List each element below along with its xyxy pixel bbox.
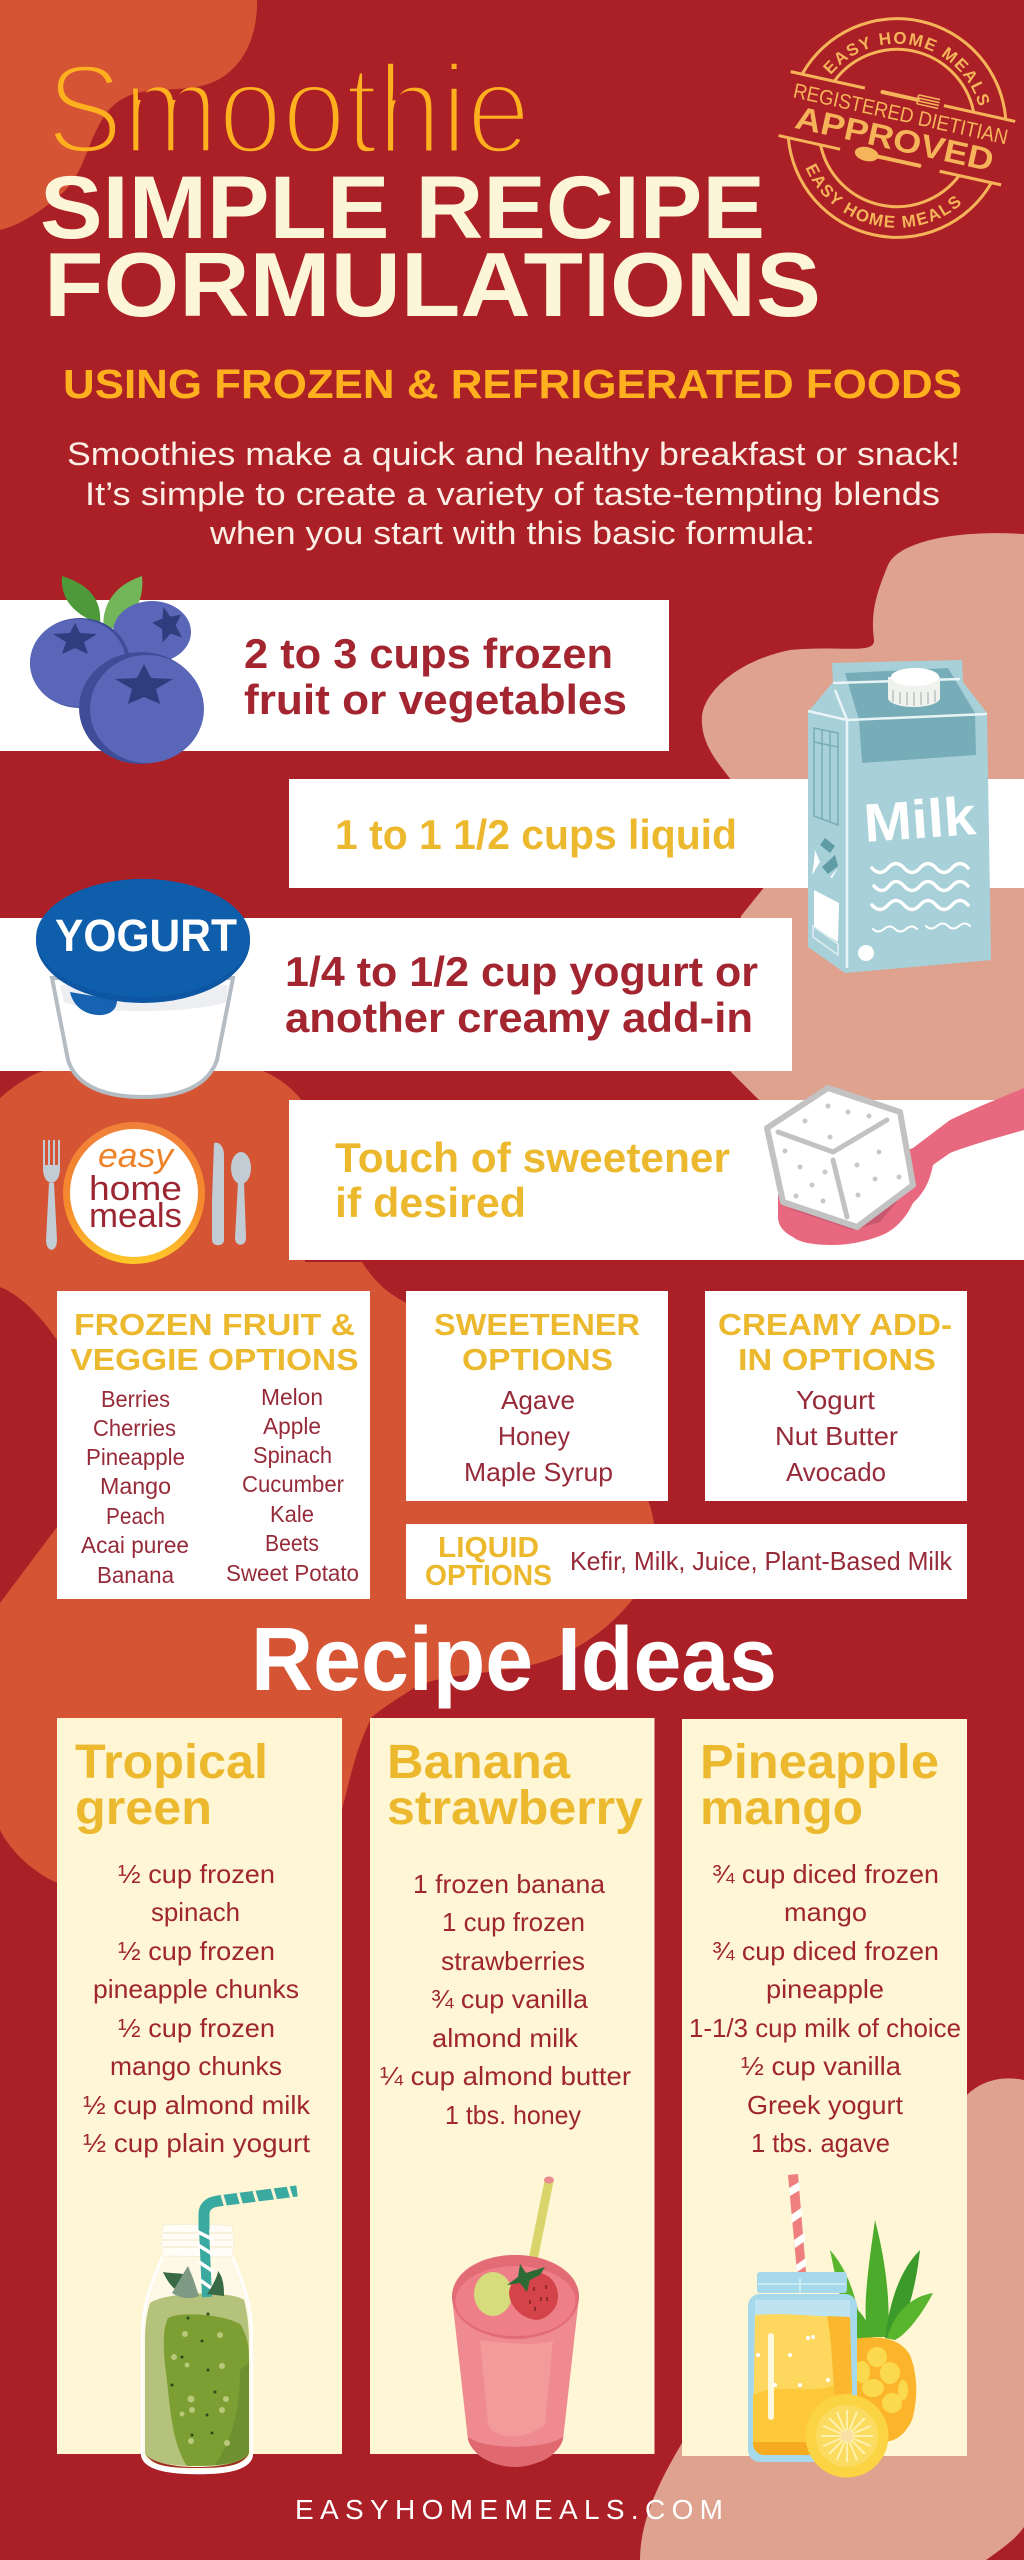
- recipe card: pineapple mango: ¾ cup diced frozen: [712, 1936, 939, 1966]
- icon: blueberries: [30, 576, 204, 764]
- panel: liquid options: LIQUID: [438, 1532, 539, 1564]
- formula bar: frozen fruit: 2 to 3 cups frozen: [244, 630, 613, 677]
- panel: sweetener options: Agave: [501, 1385, 575, 1415]
- panel: sweetener options: [406, 1291, 668, 1501]
- panel: liquid options: [406, 1524, 967, 1599]
- icon: yogurt cup: YOGURT: [55, 910, 237, 961]
- panel: creamy add-in options: IN OPTIONS: [738, 1342, 936, 1377]
- recipe card: banana strawberry: [370, 1718, 654, 2454]
- recipe card: tropical green: ½ cup frozen: [118, 2013, 275, 2043]
- panel: creamy add-in options: [705, 1291, 967, 1501]
- recipe card: pineapple mango: Greek yogurt: [747, 2090, 904, 2120]
- intro paragraph: [67, 436, 960, 551]
- panel: frozen fruit and veggie options: Sweet Potato: [226, 1560, 359, 1586]
- panel: sweetener options: OPTIONS: [462, 1342, 613, 1377]
- recipe card: tropical green: spinach: [151, 1897, 240, 1927]
- panel: frozen fruit and veggie options: Banana: [97, 1562, 174, 1588]
- title line: Simple Recipe: SIMPLE RECIPE: [40, 157, 765, 257]
- recipe card: pineapple mango: [682, 1719, 967, 2456]
- panel: creamy add-in options: Nut Butter: [775, 1421, 898, 1451]
- illustration: green smoothie bottle: [142, 2186, 297, 2473]
- stamp: registered dietitian approved: APPROVED: [792, 99, 997, 178]
- recipe card: tropical green: pineapple chunks: [93, 1974, 299, 2004]
- recipe card: tropical green: ½ cup almond milk: [83, 2090, 311, 2120]
- recipe card: pineapple mango: ¾ cup diced frozen: [712, 1859, 939, 1889]
- panel: frozen fruit and veggie options: Peach: [106, 1503, 165, 1529]
- panel: frozen fruit and veggie options: Berries: [101, 1386, 170, 1412]
- panel: frozen fruit and veggie options: Spinach: [253, 1442, 332, 1468]
- subheading: USING FROZEN & REFRIGERATED FOODS: [63, 361, 962, 407]
- panel: creamy add-in options: CREAMY ADD-: [718, 1307, 952, 1342]
- intro paragraph: Smoothies make a quick and healthy breakfast or snack!: [67, 436, 960, 472]
- recipe card: pineapple mango: 1 tbs. agave: [751, 2128, 890, 2158]
- panel: frozen fruit and veggie options: FROZEN FRUIT &: [74, 1307, 355, 1342]
- recipe card: banana strawberry: strawberries: [441, 1946, 585, 1976]
- recipe card: tropical green: mango chunks: [110, 2051, 282, 2081]
- stamp: registered dietitian approved: EASY HOME MEALS: [822, 32, 990, 106]
- heading: recipe ideas: Recipe Ideas: [251, 1610, 777, 1710]
- stamp: registered dietitian approved: [778, 17, 1016, 239]
- intro paragraph: It’s simple to create a variety of taste-tempting blends: [85, 476, 940, 512]
- logo: easy home meals: easy: [98, 1137, 175, 1175]
- icon: yogurt cup: [36, 879, 250, 1097]
- recipe card: banana strawberry: almond milk: [432, 2023, 579, 2053]
- formula bar: frozen fruit: [0, 600, 669, 751]
- panel: creamy add-in options: Avocado: [786, 1457, 886, 1487]
- panel: frozen fruit and veggie options: VEGGIE OPTIONS: [70, 1342, 358, 1377]
- logo: easy home meals: [43, 1122, 251, 1264]
- icon: sugar cube on spoon: [767, 1088, 1024, 1245]
- formula bar: frozen fruit: fruit or vegetables: [244, 676, 627, 723]
- recipe card: pineapple mango: 1-1/3 cup milk of choice: [689, 2013, 961, 2043]
- recipe card: tropical green: ½ cup frozen: [118, 1936, 275, 1966]
- title line: Formulations: FORMULATIONS: [44, 235, 821, 336]
- panel: frozen fruit and veggie options: Kale: [270, 1501, 314, 1527]
- recipe card: pineapple mango: mango: [784, 1897, 867, 1927]
- recipe card: tropical green: Tropical: [75, 1736, 268, 1789]
- icon: milk carton: Milk: [862, 786, 979, 854]
- panel: sweetener options: Honey: [498, 1421, 570, 1451]
- icon: milk carton: [808, 660, 991, 973]
- recipe card: banana strawberry: strawberry: [387, 1782, 643, 1835]
- recipe card: tropical green: green: [75, 1782, 212, 1835]
- recipe card: pineapple mango: mango: [700, 1782, 863, 1835]
- formula bar: liquid: 1 to 1 1/2 cups liquid: [335, 811, 737, 858]
- recipe card: tropical green: ½ cup frozen: [118, 1859, 275, 1889]
- formula bar: sweetener: Touch of sweetener: [335, 1134, 730, 1181]
- panel: frozen fruit and veggie options: Pineapple: [86, 1444, 185, 1470]
- footer url: EASYHOMEMEALS.COM: [295, 2494, 726, 2525]
- stamp: registered dietitian approved: EASY HOME MEALS: [806, 163, 960, 228]
- panel: frozen fruit and veggie options: Acai puree: [81, 1532, 189, 1558]
- panel: frozen fruit and veggie options: Apple: [263, 1413, 321, 1439]
- illustration: pineapple mango jar and pineapple: [748, 2174, 933, 2478]
- panel: liquid options: OPTIONS: [425, 1560, 552, 1592]
- recipe card: banana strawberry: 1 cup frozen: [442, 1907, 585, 1937]
- recipe card: pineapple mango: pineapple: [766, 1974, 884, 2004]
- recipe card: banana strawberry: 1 frozen banana: [413, 1869, 606, 1899]
- recipe card: pineapple mango: ½ cup vanilla: [741, 2051, 902, 2081]
- recipe card: banana strawberry: ¾ cup vanilla: [431, 1984, 589, 2014]
- recipe card: banana strawberry: 1 tbs. honey: [445, 2100, 581, 2130]
- formula bar: sweetener: if desired: [335, 1179, 526, 1226]
- recipe card: tropical green: [57, 1718, 342, 2454]
- panel: frozen fruit and veggie options: Cucumber: [242, 1471, 344, 1497]
- formula bar: yogurt: another creamy add-in: [285, 994, 753, 1041]
- recipe card: pineapple mango: Pineapple: [700, 1736, 939, 1789]
- panel: creamy add-in options: Yogurt: [796, 1385, 876, 1415]
- panel: frozen fruit and veggie options: Mango: [100, 1473, 171, 1499]
- formula bar: yogurt: [0, 918, 792, 1071]
- intro paragraph: when you start with this basic formula:: [209, 515, 815, 551]
- panel: sweetener options: SWEETENER: [434, 1307, 640, 1342]
- panel: frozen fruit and veggie options: Beets: [265, 1530, 319, 1556]
- title line: Smoothie: Smoothie: [46, 38, 530, 180]
- panel: sweetener options: Maple Syrup: [464, 1457, 613, 1487]
- logo: easy home meals: home: [89, 1170, 182, 1208]
- panel: frozen fruit and veggie options: [57, 1291, 370, 1599]
- formula bar: yogurt: 1/4 to 1/2 cup yogurt or: [285, 948, 758, 995]
- formula bar: liquid: [289, 779, 1024, 888]
- logo: easy home meals: meals: [89, 1197, 182, 1235]
- recipe card: banana strawberry: Banana: [387, 1736, 570, 1789]
- formula bar: sweetener: [289, 1100, 1024, 1260]
- panel: liquid options: Kefir, Milk, Juice, Plant-Based Milk: [570, 1546, 953, 1576]
- panel: frozen fruit and veggie options: Cherries: [93, 1415, 176, 1441]
- title: [40, 38, 821, 336]
- recipe card: banana strawberry: ¼ cup almond butter: [380, 2061, 631, 2091]
- illustration: strawberry banana smoothie: [452, 2176, 579, 2467]
- recipe card: tropical green: ½ cup plain yogurt: [83, 2128, 311, 2158]
- panel: frozen fruit and veggie options: Melon: [261, 1384, 323, 1410]
